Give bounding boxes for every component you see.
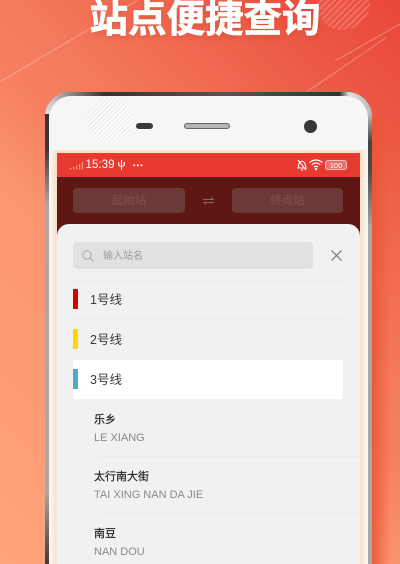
speaker bbox=[184, 123, 230, 129]
station name: 太行南大街 bbox=[94, 471, 149, 483]
battery: 100 bbox=[330, 161, 342, 170]
search placeholder: 输入站名 bbox=[103, 251, 143, 262]
swap icon bbox=[203, 197, 214, 205]
camera bbox=[304, 120, 317, 133]
frame left lower edge bbox=[45, 492, 49, 564]
screen glow bbox=[50, 150, 367, 564]
end station button: 终点站 bbox=[270, 195, 305, 207]
phone body bbox=[48, 96, 368, 564]
usb icon bbox=[118, 160, 125, 170]
station name: 南豆 bbox=[94, 528, 116, 540]
route bar bbox=[57, 177, 360, 224]
more dots bbox=[133, 164, 142, 166]
station name: 乐乡 bbox=[94, 414, 116, 426]
line 2 row bbox=[73, 329, 122, 349]
line 3 label: 3号线 bbox=[90, 373, 122, 387]
station pinyin: TAI XING NAN DA JIE bbox=[94, 489, 203, 501]
bottom sheet bbox=[57, 224, 360, 564]
line 3 color bbox=[73, 369, 78, 389]
station: Le Xiang bbox=[94, 414, 145, 444]
phone shadow bbox=[371, 117, 391, 564]
phone bbox=[45, 92, 388, 564]
battery bbox=[325, 160, 347, 170]
frame top edge bbox=[45, 92, 372, 114]
phone frame bbox=[45, 92, 372, 564]
muted bell icon bbox=[297, 160, 307, 171]
search icon bbox=[82, 250, 94, 262]
sensor bbox=[136, 123, 153, 129]
station pinyin: LE XIANG bbox=[94, 432, 145, 444]
signal icon bbox=[70, 162, 83, 170]
frame right edge bbox=[368, 114, 372, 224]
time: 15:39 bbox=[86, 158, 115, 171]
line 1 color bbox=[73, 289, 78, 309]
line 1 row bbox=[73, 280, 343, 320]
station pinyin: NAN DOU bbox=[94, 546, 145, 558]
line 2 label: 2号线 bbox=[90, 333, 122, 347]
start station button bbox=[73, 188, 185, 213]
start station button: 起始站 bbox=[112, 195, 146, 207]
status bar bbox=[57, 153, 360, 177]
line 1 label: 1号线 bbox=[90, 293, 122, 307]
station: Nan Dou bbox=[94, 528, 145, 558]
end station button bbox=[232, 188, 343, 213]
screen bbox=[57, 153, 360, 564]
station: Tai Xing Nan Da Jie bbox=[94, 470, 203, 501]
frame left upper edge bbox=[45, 114, 49, 204]
line 2 color bbox=[73, 329, 78, 349]
frame left middle edge bbox=[45, 204, 49, 492]
wifi icon bbox=[309, 159, 323, 170]
striped circle bbox=[87, 97, 133, 143]
search box bbox=[73, 242, 313, 269]
line 3 row bbox=[73, 360, 343, 399]
close icon bbox=[331, 250, 342, 261]
